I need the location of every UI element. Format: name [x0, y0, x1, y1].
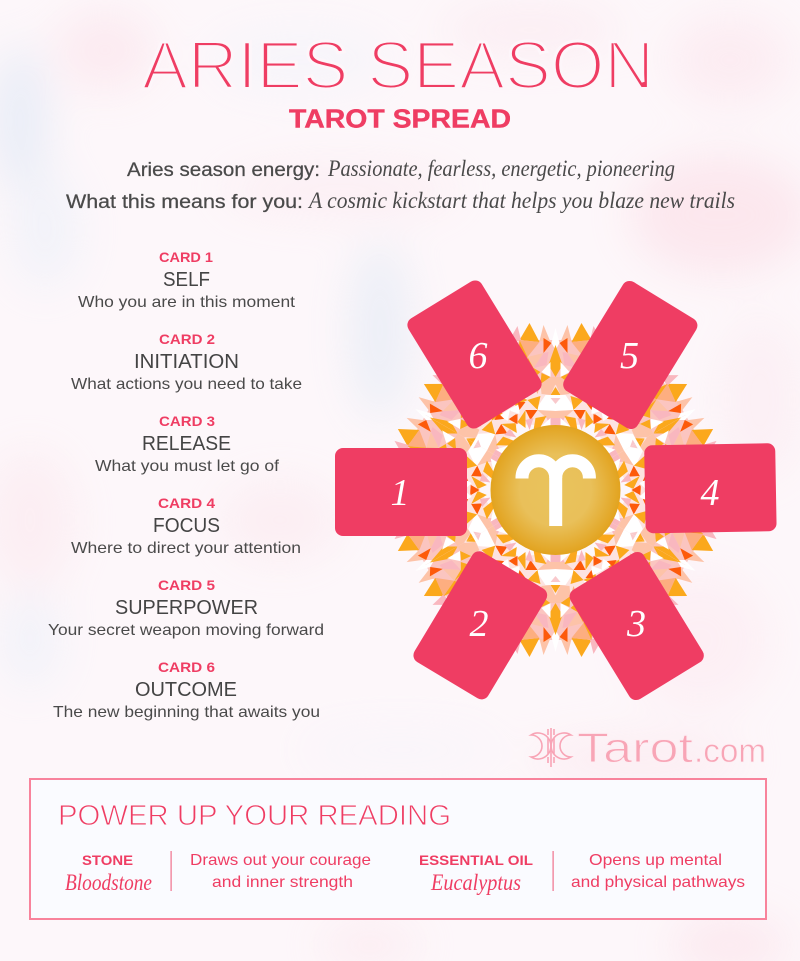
card 4 — [644, 443, 777, 533]
tarot cards — [335, 277, 777, 703]
card 5 description: CARD 5 — [158, 577, 215, 593]
text block: season energy: Passionate, fearless, energetic, pioneering — [327, 156, 675, 181]
title: ARIES SEASON — [142, 28, 654, 104]
essential oil label — [419, 852, 533, 895]
essential oil label: ESSENTIAL OIL — [419, 852, 533, 868]
stone label: Bloodstone — [65, 870, 152, 895]
card 4 description — [71, 495, 301, 557]
text block: what this means — [66, 188, 735, 213]
card 4 description: FOCUS — [153, 515, 220, 537]
stone description: Draws out your courage — [190, 852, 371, 869]
stone label: STONE — [82, 852, 133, 868]
text block: what this means: A cosmic kickstart that helps you blaze new trails — [307, 188, 735, 213]
sun circle with aries glyph — [490, 425, 620, 555]
card 3 — [567, 549, 707, 703]
card 3: 3 — [626, 603, 646, 645]
wordmark: Tarot — [577, 724, 693, 771]
card 5: 5 — [620, 335, 639, 377]
card 6 — [404, 277, 545, 432]
card 6 description: CARD 6 — [158, 659, 215, 675]
card 1 description — [78, 249, 296, 311]
card 2 description: INITIATION — [134, 351, 239, 373]
card list — [48, 249, 324, 721]
card 1 description: CARD 1 — [159, 249, 213, 265]
card 4 description: CARD 4 — [158, 495, 215, 511]
card 6 description: The new beginning that awaits you — [53, 704, 320, 721]
essential oil description: and physical pathways — [571, 874, 745, 891]
card 6 description — [53, 659, 320, 721]
card 1 description: Who you are in this moment — [78, 294, 296, 311]
text block: what this means: What this means for you: — [66, 192, 303, 213]
icon: crescent moons — [531, 728, 571, 767]
text block: season energy — [127, 156, 675, 181]
card 5 — [560, 278, 700, 432]
card 3 description — [95, 413, 280, 475]
card 6: 6 — [468, 335, 488, 377]
card 5 description — [48, 577, 324, 639]
essential oil description: Opens up mental — [589, 852, 722, 869]
icon: aries symbol — [522, 461, 589, 526]
card 5 description: SUPERPOWER — [115, 597, 258, 619]
card 2: 2 — [470, 603, 488, 645]
card 2 — [410, 548, 550, 702]
stone description — [190, 852, 371, 891]
panel: power up your reading — [30, 779, 766, 919]
essential oil description — [571, 852, 745, 891]
card 3 description: What you must let go of — [95, 458, 280, 475]
card 1: 1 — [390, 472, 410, 514]
wordmark: .com — [694, 732, 766, 769]
card 6 description: OUTCOME — [135, 679, 237, 701]
stone label — [65, 852, 152, 895]
card 4: 4 — [700, 472, 720, 514]
card 3 description: CARD 3 — [159, 413, 215, 429]
card 5 description: Your secret weapon moving forward — [48, 622, 324, 639]
wordmark — [577, 724, 766, 771]
stone description: and inner strength — [212, 874, 353, 891]
card 2 description: CARD 2 — [159, 331, 215, 347]
card 1 — [335, 448, 467, 536]
essential oil label: Eucalyptus — [430, 870, 521, 895]
card 2 description: What actions you need to take — [71, 376, 302, 393]
subtitle: TAROT SPREAD — [289, 104, 511, 134]
card 2 description — [71, 331, 302, 393]
card 4 description: Where to direct your attention — [71, 540, 301, 557]
card 3 description: RELEASE — [142, 433, 231, 455]
logo: Tarot.com — [531, 724, 766, 771]
text block: season energy: Aries season energy: — [127, 160, 320, 181]
panel heading: POWER UP YOUR READING — [58, 800, 451, 832]
card 1 description: SELF — [163, 269, 210, 291]
mandala — [372, 323, 739, 657]
